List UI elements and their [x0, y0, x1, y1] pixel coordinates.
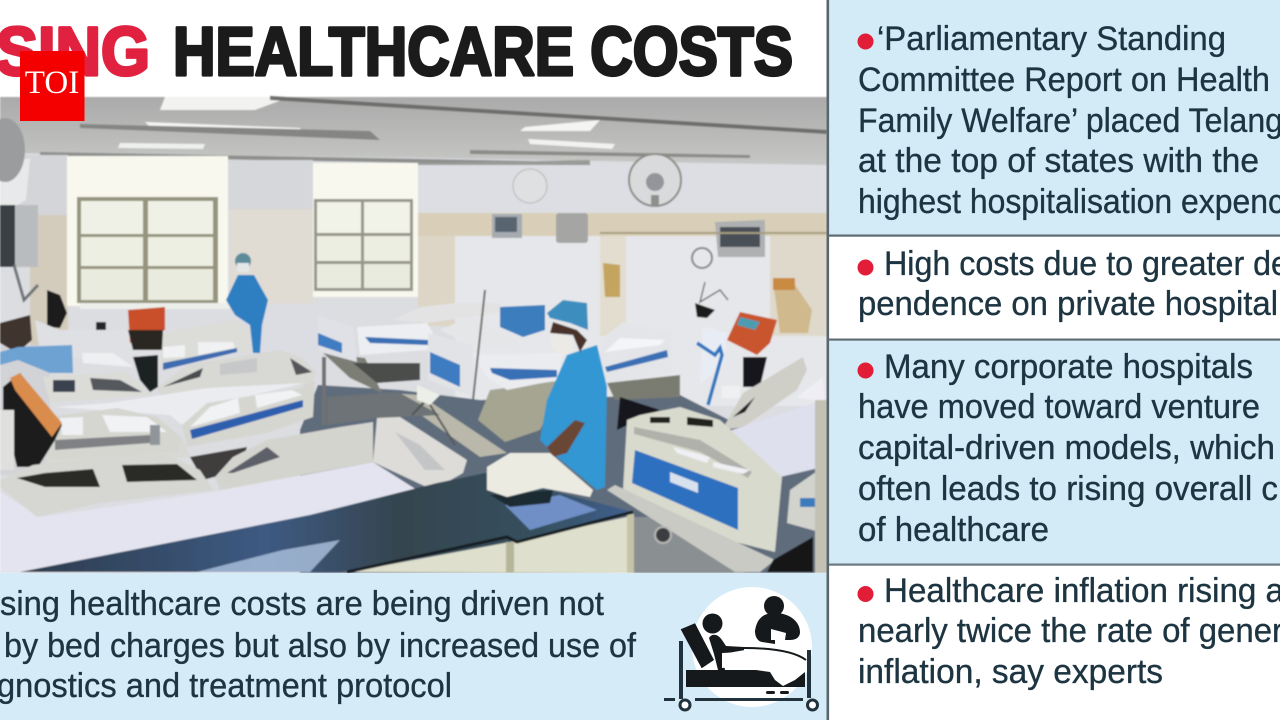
wall fans — [629, 154, 681, 206]
back left beds — [35, 320, 175, 370]
panel: venture capital models: of healthcare — [858, 511, 1049, 549]
TOI logo — [20, 51, 84, 121]
panel: private hospital dependence — [829, 237, 1280, 339]
panel: venture capital models: have moved toward venture — [858, 388, 1260, 426]
foreground left bed mattress — [0, 462, 417, 572]
panel: parliamentary report: ‘Parliamentary Standing — [877, 20, 1226, 58]
photo: hospital ward — [0, 96, 827, 573]
heading: rising healthcare costs: HEALTHCARE COSTS — [173, 13, 793, 90]
panel: parliamentary report: at the top of states with the — [858, 142, 1259, 180]
right equipment — [700, 327, 727, 383]
cloth — [490, 490, 553, 507]
panel: parliamentary report: Committee Report on Health — [858, 61, 1270, 99]
panel: parliamentary report — [829, 0, 1280, 235]
far nurse — [226, 275, 268, 353]
floor — [300, 385, 827, 573]
panel: private hospital dependence: pendence on private hospital — [858, 285, 1278, 323]
TOI logo: TOI — [25, 65, 79, 101]
window right — [313, 163, 418, 297]
bottom caption panel — [0, 573, 827, 720]
counter top — [20, 473, 633, 572]
panel: healthcare inflation: inflation, say experts — [858, 653, 1163, 691]
panel: venture capital models — [829, 341, 1280, 564]
right foreground bed — [723, 400, 823, 477]
caption text: sing healthcare costs are being driven not — [0, 585, 605, 623]
caption text — [0, 585, 637, 705]
left device — [3, 373, 62, 467]
title band — [0, 0, 827, 97]
middle bed — [190, 447, 247, 480]
ceiling — [0, 97, 827, 165]
window left — [67, 156, 228, 306]
counter front — [350, 517, 627, 573]
heading: rising healthcare costs: SING — [0, 13, 150, 90]
icon: patient in bed with nurse — [664, 587, 818, 710]
walls — [0, 155, 68, 215]
left equipment — [0, 205, 38, 267]
panel: venture capital models: often leads to rising overall c — [858, 470, 1278, 508]
cleaner — [540, 300, 607, 490]
panel: venture capital models: Many corporate hospitals — [884, 348, 1253, 386]
bed behind cleaner — [607, 375, 680, 400]
foreground bed rails — [0, 455, 213, 517]
wall monitors and hoses — [715, 220, 765, 257]
back centre beds — [393, 303, 500, 323]
panel: venture capital models: capital-driven models, which — [858, 429, 1275, 467]
heading: rising healthcare costs — [0, 13, 793, 90]
caption text: gnostics and treatment protocol — [0, 667, 452, 705]
caption text: by bed charges but also by increased use of — [4, 627, 637, 665]
panel: healthcare inflation — [829, 566, 1280, 720]
